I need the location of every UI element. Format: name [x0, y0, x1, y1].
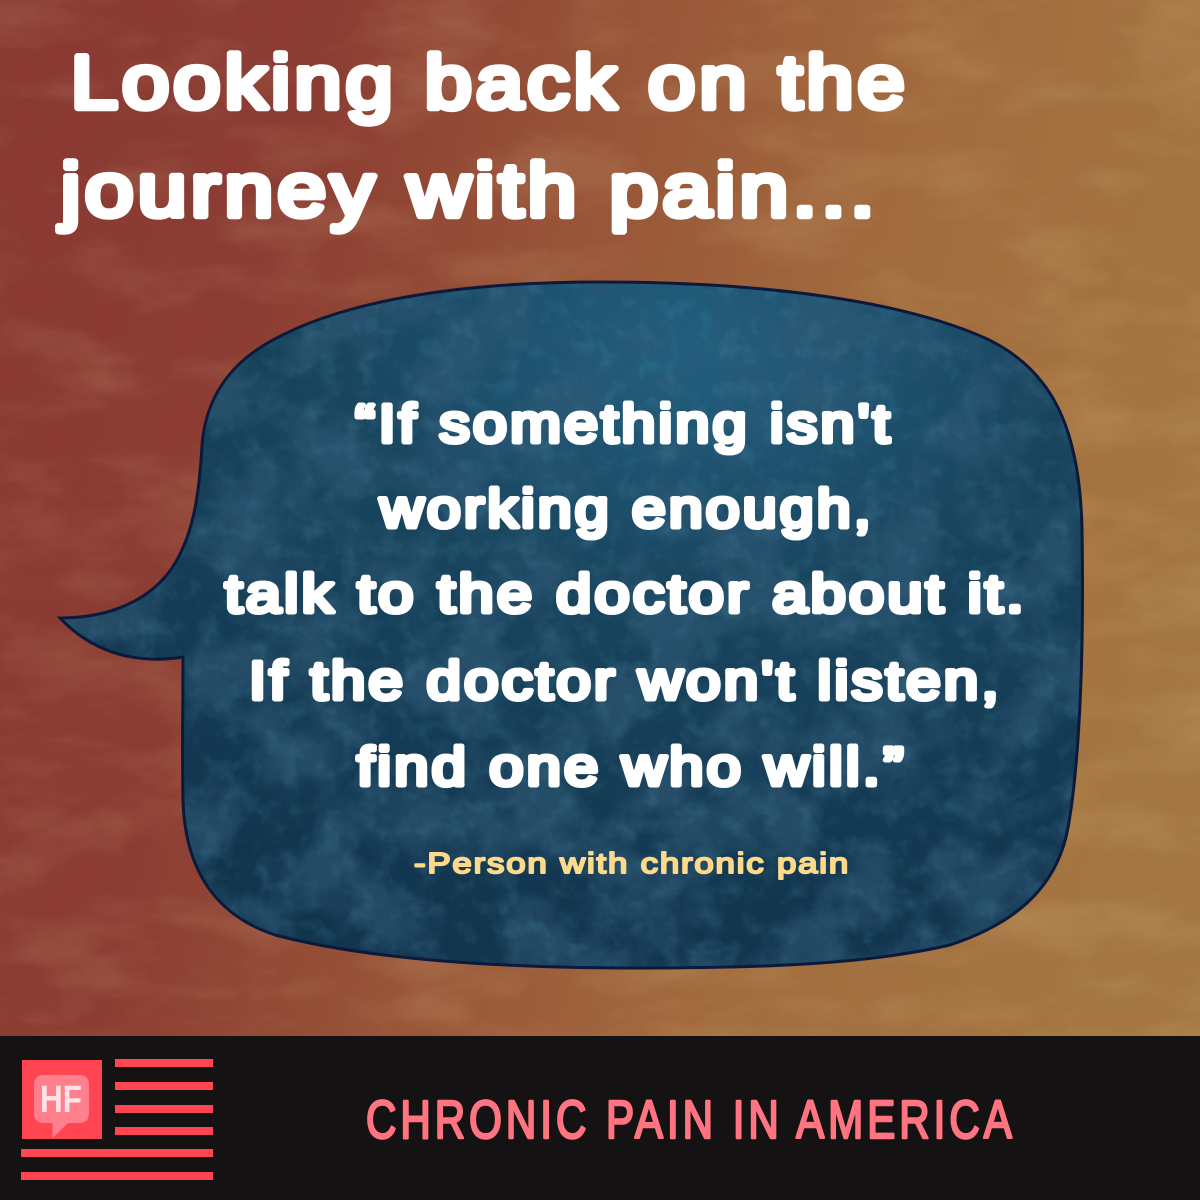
quote text: find one who will.” — [357, 737, 907, 797]
logo: HF flag: HF — [40, 1079, 82, 1121]
attribution: -Person with chronic pain — [414, 848, 850, 880]
footer title: CHRONIC PAIN IN AMERICA — [366, 1090, 1012, 1150]
title: journey with pain... — [59, 148, 879, 232]
logo: HF flag — [21, 1059, 213, 1180]
quote text: working enough, — [379, 479, 874, 539]
footer bar — [0, 1036, 1200, 1200]
quote text: If the doctor won't listen, — [249, 651, 1002, 711]
title: Looking back on the — [71, 40, 909, 124]
quote text: “If something isn't — [355, 394, 893, 454]
quote text — [225, 394, 1027, 797]
quote text: talk to the doctor about it. — [225, 564, 1027, 624]
title — [59, 40, 909, 232]
speech bubble — [50, 270, 1100, 980]
